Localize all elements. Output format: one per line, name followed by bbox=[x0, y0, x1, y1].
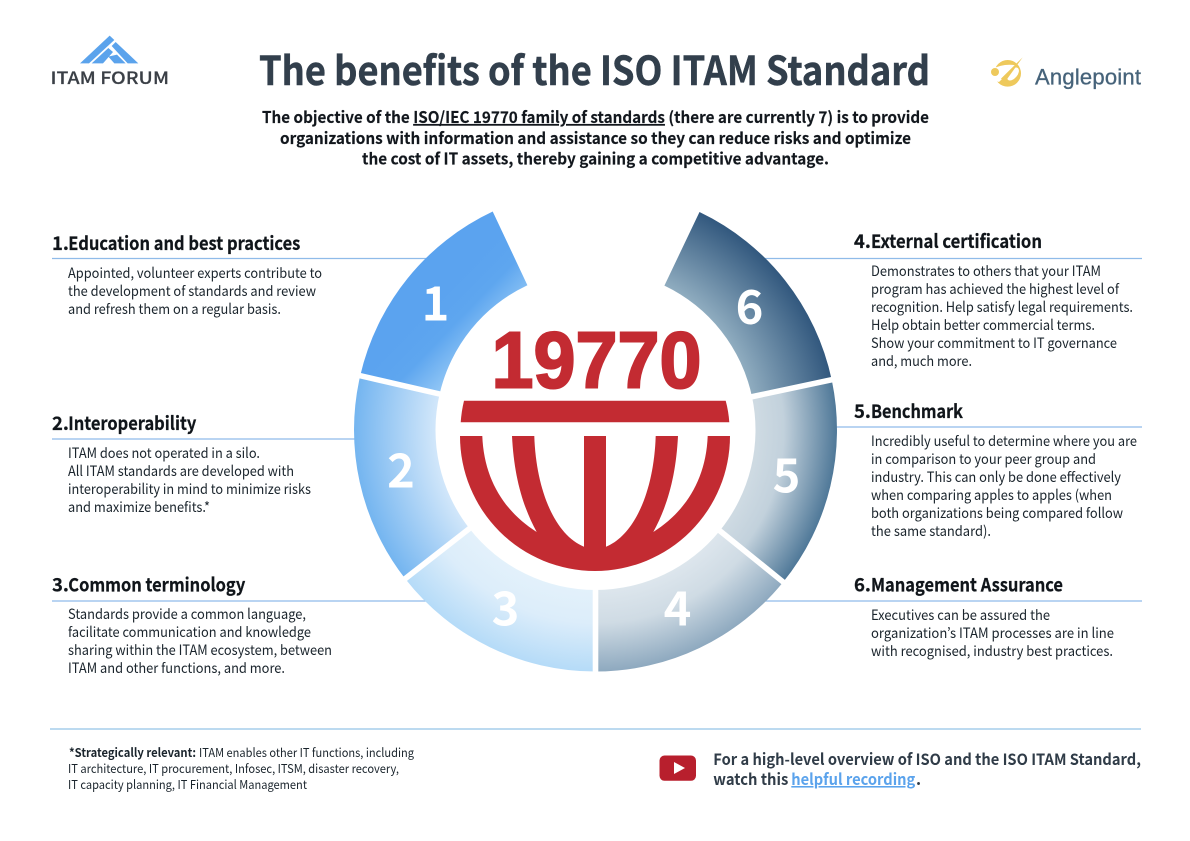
body text bbox=[68, 263, 322, 319]
heading: Common terminology bbox=[68, 572, 246, 598]
panel: 1 Education and best practices bbox=[52, 230, 322, 319]
body text: Incredibly useful to determine where you are bbox=[871, 431, 1137, 451]
intro paragraph: The objective of the ISO/IEC 19770 family of standards (there are currently 7) is to provide bbox=[262, 105, 929, 128]
chart: six-segment ring bbox=[354, 212, 837, 674]
body text: organization’s ITAM processes are in line bbox=[871, 623, 1114, 643]
video callout text: . bbox=[916, 768, 921, 790]
title: The benefits of the ISO ITAM Standard bbox=[259, 40, 930, 97]
body text: and, much more. bbox=[871, 351, 972, 371]
heading: 2. bbox=[52, 410, 69, 436]
body text: in comparison to your peer group and bbox=[871, 449, 1096, 469]
body text bbox=[871, 261, 1133, 371]
emblem top band bbox=[461, 401, 729, 422]
body text bbox=[871, 431, 1137, 541]
emblem number: 19770 bbox=[492, 316, 702, 404]
segment 3 bbox=[405, 528, 596, 672]
body text: ITAM does not operated in a silo. bbox=[68, 443, 260, 463]
body text: Help obtain better commercial terms. bbox=[871, 315, 1095, 335]
segment numbers: 3 bbox=[492, 570, 519, 640]
segment 1 bbox=[360, 212, 527, 394]
link: helpful recording: helpful recording bbox=[791, 768, 916, 790]
icon: video play button bbox=[660, 756, 696, 781]
logo wordmark: Anglepoint bbox=[1035, 64, 1141, 90]
heading: 5. bbox=[854, 398, 871, 424]
heading: Education and best practices bbox=[68, 230, 300, 256]
body text: recognition. Help satisfy legal requirements. bbox=[871, 297, 1133, 317]
body text: program has achieved the highest level of bbox=[871, 279, 1119, 299]
segment 5 bbox=[720, 380, 837, 582]
logo: Anglepoint bbox=[990, 57, 1141, 90]
heading: 4. bbox=[854, 228, 871, 254]
body text bbox=[68, 443, 311, 517]
panel: 6 Management Assurance bbox=[854, 572, 1114, 661]
panel: 5 Benchmark bbox=[854, 398, 1137, 541]
heading: External certification bbox=[871, 228, 1042, 254]
segment 2 bbox=[354, 376, 469, 579]
segment 6 bbox=[664, 212, 832, 397]
segment 4 bbox=[596, 531, 783, 672]
body text: industry. This can only be done effectively bbox=[871, 467, 1122, 487]
logo wordmark: ITAM FORUM bbox=[50, 65, 169, 89]
body text: Demonstrates to others that your ITAM bbox=[871, 261, 1101, 281]
heading: 1. bbox=[52, 230, 69, 256]
body text: the development of standards and review bbox=[68, 281, 316, 301]
heading: Management Assurance bbox=[871, 572, 1063, 598]
emblem globe bbox=[460, 436, 730, 571]
panel: 2 Interoperability bbox=[52, 410, 311, 517]
body text: facilitate communication and knowledge bbox=[68, 622, 311, 642]
video callout text: For a high-level overview of ISO and the ISO ITAM Standard, bbox=[713, 748, 1141, 770]
logo: ITAM Forum bbox=[50, 36, 169, 89]
body text: Standards provide a common language, bbox=[68, 604, 306, 624]
body text: Show your commitment to IT governance bbox=[871, 333, 1117, 353]
body text: and refresh them on a regular basis. bbox=[68, 299, 281, 319]
video callout text bbox=[713, 748, 1141, 790]
footnote: *Strategically relevant: bbox=[69, 743, 196, 761]
video callout text: watch this bbox=[713, 768, 789, 790]
intro paragraph: the cost of IT assets, thereby gaining a competitive advantage. bbox=[362, 146, 829, 170]
icon: Anglepoint mark bbox=[990, 57, 1023, 87]
heading: Benchmark bbox=[871, 398, 964, 424]
footnote: IT capacity planning, IT Financial Management bbox=[68, 775, 307, 793]
intro paragraph bbox=[262, 105, 929, 170]
footnote: ITAM enables other IT functions, including bbox=[199, 743, 414, 761]
heading: Interoperability bbox=[68, 410, 197, 436]
segment numbers: 1 bbox=[422, 266, 449, 334]
body text bbox=[871, 605, 1114, 661]
body text: when comparing apples to apples (when bbox=[871, 485, 1112, 505]
segment numbers: 2 bbox=[387, 432, 415, 502]
segment numbers: 6 bbox=[736, 269, 763, 338]
heading: 6. bbox=[854, 572, 871, 598]
body text: All ITAM standards are developed with bbox=[68, 461, 294, 481]
body text: and maximize benefits.* bbox=[68, 497, 210, 517]
body text: the same standard). bbox=[871, 521, 991, 541]
body text: Appointed, volunteer experts contribute to bbox=[68, 263, 322, 283]
footnote bbox=[68, 743, 414, 793]
body text: with recognised, industry best practices. bbox=[871, 641, 1113, 661]
icon: ITAM Forum roof chevrons bbox=[80, 36, 138, 63]
heading: 3. bbox=[52, 572, 69, 598]
body text: sharing within the ITAM ecosystem, between bbox=[68, 640, 332, 660]
emblem: 19770 globe bbox=[460, 316, 730, 571]
body text: ITAM and other functions, and more. bbox=[68, 658, 285, 678]
panel: 4 External certification bbox=[854, 228, 1133, 371]
body text: interoperability in mind to minimize risks bbox=[68, 479, 311, 499]
panel: 3 Common terminology bbox=[52, 572, 332, 678]
body text: both organizations being compared follow bbox=[871, 503, 1123, 523]
body text bbox=[68, 604, 332, 678]
intro paragraph: organizations with information and assistance so they can reduce risks and optimize bbox=[280, 126, 911, 149]
segment numbers: 4 bbox=[664, 570, 691, 640]
segment numbers: 5 bbox=[773, 438, 800, 506]
segment numbers bbox=[387, 266, 800, 640]
footnote: IT architecture, IT procurement, Infosec, ITSM, disaster recovery, bbox=[68, 759, 399, 777]
body text: Executives can be assured the bbox=[871, 605, 1050, 625]
